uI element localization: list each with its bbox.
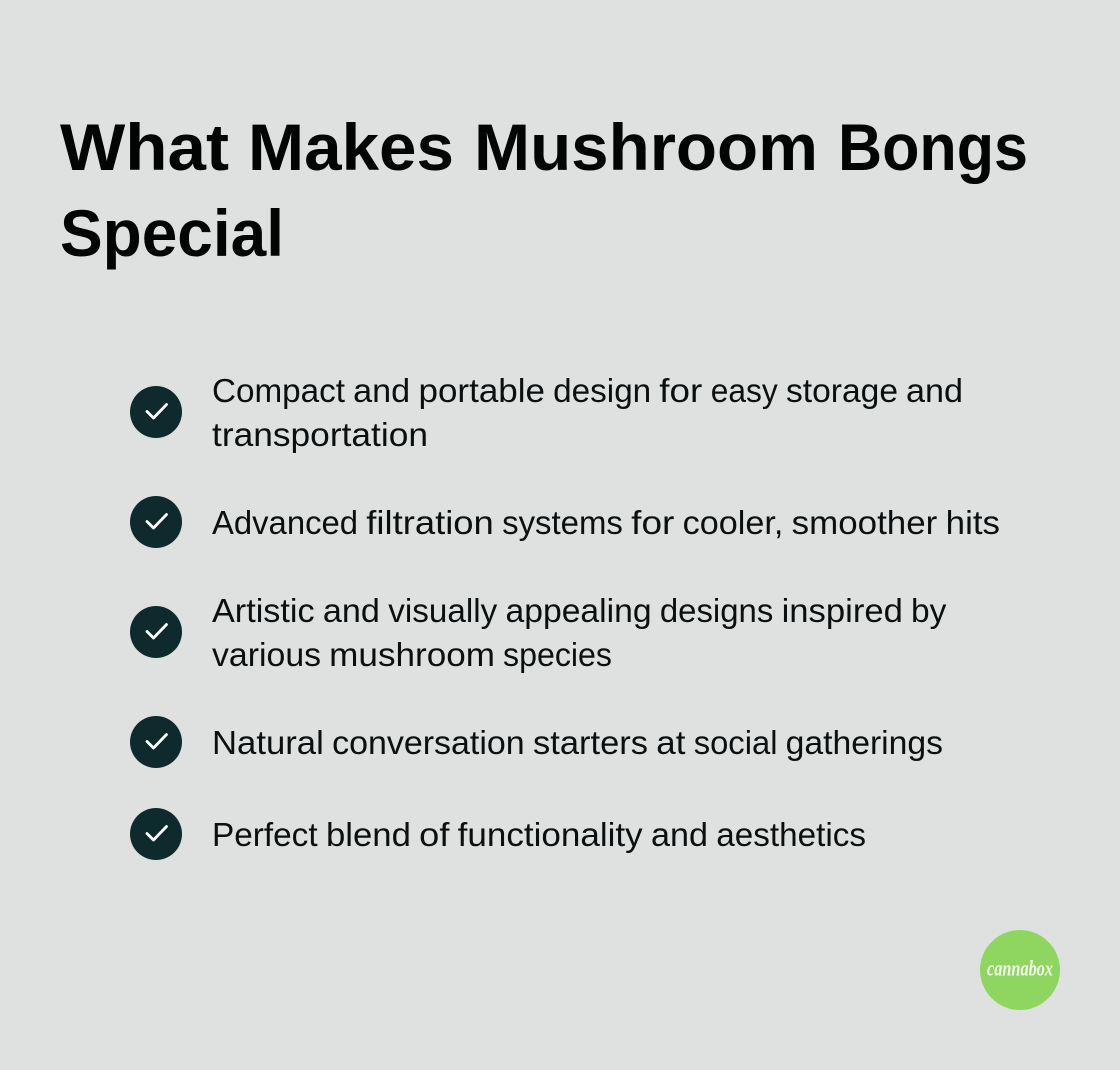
- logo: cannabox badge: cannabox: [987, 956, 1053, 980]
- checklist: [130, 372, 1000, 860]
- list item 4: gatherings: [786, 724, 943, 761]
- list item 1: design: [553, 372, 651, 409]
- list item 3: species: [503, 636, 612, 673]
- title: Bongs: [838, 110, 1028, 184]
- list item 3: designs: [660, 592, 773, 629]
- list item 5: blend: [326, 816, 411, 853]
- list item 1: for: [659, 372, 702, 409]
- list item 3: appealing: [506, 592, 652, 629]
- list item 3: inspired: [782, 592, 903, 629]
- list item 4: Natural: [212, 724, 324, 761]
- list item 5: Perfect: [212, 816, 318, 853]
- list item 2: filtration: [366, 504, 494, 541]
- title: [60, 110, 1028, 270]
- list item 5: functionality: [458, 816, 643, 853]
- list item 1: easy: [711, 372, 778, 409]
- list item 1: transportation: [212, 416, 428, 453]
- list item 5: [130, 808, 866, 860]
- list item 2: cooler,: [683, 504, 783, 541]
- list item 5: aesthetics: [716, 816, 866, 853]
- list item 2: smoother: [792, 504, 937, 541]
- list item 2: Advanced: [212, 504, 358, 541]
- list item 2: systems: [502, 504, 623, 541]
- list item 2: hits: [946, 504, 1000, 541]
- list item 4: starters: [533, 724, 648, 761]
- list item 3: and: [323, 592, 380, 629]
- list item 1: and: [353, 372, 410, 409]
- list item 2: [130, 496, 1000, 548]
- title: Makes: [248, 110, 454, 184]
- list item 3: visually: [388, 592, 498, 629]
- list item 3: by: [911, 592, 947, 629]
- list item 3: mushroom: [329, 636, 495, 673]
- list item 1: [130, 372, 963, 453]
- list item 3: Artistic: [212, 592, 315, 629]
- list item 4: at: [656, 724, 685, 761]
- list item 4: conversation: [332, 724, 525, 761]
- title: Mushroom: [474, 110, 818, 184]
- logo: cannabox badge: [980, 930, 1060, 1010]
- list item 1: storage: [786, 372, 898, 409]
- title: What: [60, 110, 229, 184]
- list item 1: portable: [418, 372, 545, 409]
- list item 1: Compact: [212, 372, 345, 409]
- list item 5: and: [651, 816, 708, 853]
- list item 4: social: [694, 724, 778, 761]
- list item 3: [130, 592, 947, 673]
- list item 5: of: [419, 816, 450, 853]
- title: Special: [60, 196, 284, 270]
- list item 3: various: [212, 636, 321, 673]
- list item 4: [130, 716, 943, 768]
- list item 2: for: [631, 504, 674, 541]
- list item 1: and: [906, 372, 963, 409]
